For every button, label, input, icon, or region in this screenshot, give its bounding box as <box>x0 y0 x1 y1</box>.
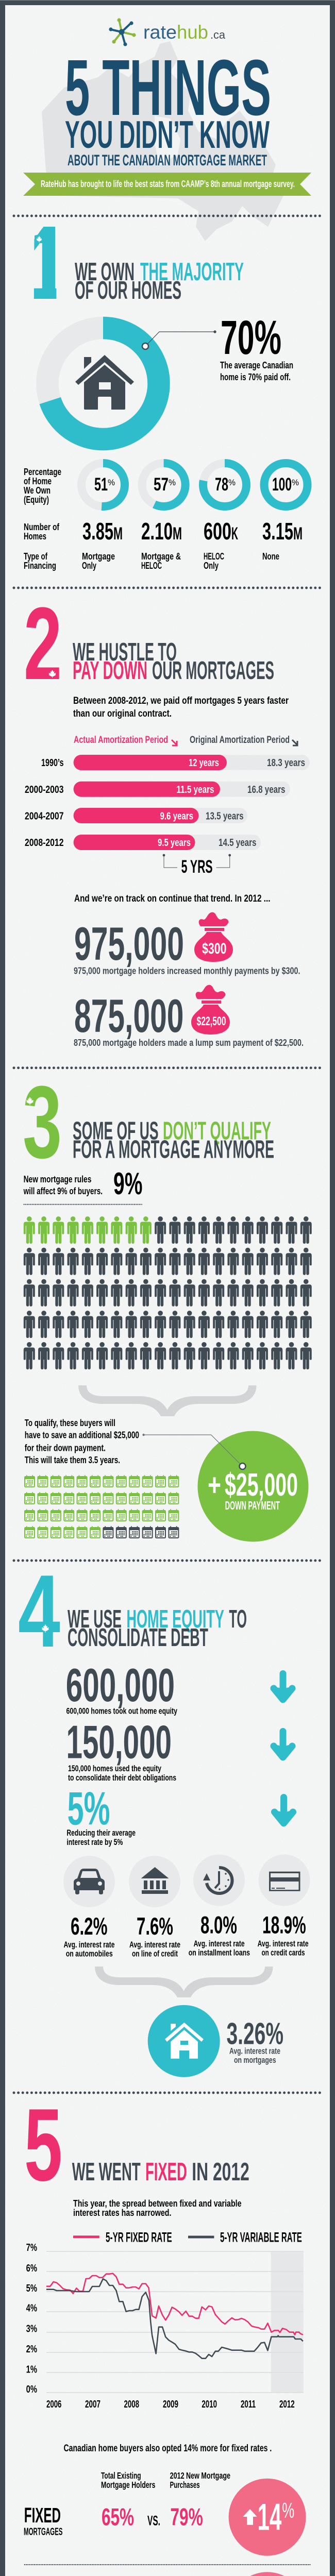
section 4 heading: HOME EQUITY <box>126 1605 224 1633</box>
icon: arrow down <box>274 1797 293 1823</box>
column headings: 2012 New Mortgage <box>170 2470 230 2481</box>
ribbon banner <box>23 173 311 196</box>
small donut 51%: % <box>108 478 115 487</box>
icon: credit card <box>258 1855 310 1906</box>
row: type of financing: HELOC <box>204 551 224 562</box>
section 4 heading: WE USE <box>68 1605 122 1633</box>
line chart: fixed vs variable rates: 6% <box>26 2263 37 2274</box>
interest rates row: 6.2% <box>71 1912 107 1940</box>
line chart: fixed vs variable rates: 0% <box>26 2384 37 2395</box>
row: type of financing: None <box>262 551 279 562</box>
stat: 5%: 5% <box>68 1783 110 1835</box>
row: fixed mortgages: % <box>282 2498 294 2522</box>
row label: percentage <box>24 467 61 505</box>
stat: 5%: Reducing their average <box>66 1828 136 1838</box>
section 3 heading: SOME OF US <box>73 1117 159 1145</box>
trend text: And we’re on track on continue that trend. In 2012 ... <box>74 893 270 904</box>
chart legend <box>73 2230 302 2245</box>
interest rates row <box>64 1911 309 1959</box>
section 5 numeral: 5 <box>24 2088 62 2202</box>
line chart: fixed vs variable rates: 2012 <box>279 2399 295 2410</box>
background map of Canada <box>42 41 289 241</box>
stat: 9% of buyers <box>23 1166 142 1201</box>
small donut 51%: 51 <box>94 474 108 495</box>
stat: 3.26%: Avg. interest rate <box>229 2046 280 2056</box>
small donut 57%: 57 <box>154 474 169 495</box>
section 3 heading <box>73 1117 274 1164</box>
section 4 heading <box>68 1605 247 1652</box>
section 5 heading: FIXED <box>145 2158 187 2186</box>
stat: 150,000: to consolidate their debt obligations <box>68 1773 176 1783</box>
circle: down payment <box>142 1431 308 1541</box>
section 2 intro text: Between 2008-2012, we paid off mortgages 5 years faster <box>73 696 289 706</box>
stat: 3.26%: on mortgages <box>234 2055 276 2065</box>
pictogram: 100 people, 9 highlighted <box>24 1216 312 1369</box>
row: fixed mortgages <box>24 2479 306 2556</box>
bar chart: amortization: 18.3 years <box>267 757 305 769</box>
bar chart: amortization: 2000-2003 <box>25 784 64 795</box>
bar chart: amortization: 9.5 years <box>158 837 191 849</box>
line chart: fixed vs variable rates: 1% <box>26 2364 37 2376</box>
interest rates row: 7.6% <box>137 1912 173 1940</box>
bar chart: amortization: 13.5 years <box>206 811 244 822</box>
row: number of homes: Homes <box>24 531 46 541</box>
icon: arrow down <box>274 1673 292 1700</box>
row: number of homes: K <box>231 524 238 544</box>
stat: 3.26% <box>227 2017 283 2065</box>
stat: 600,000 <box>66 1659 177 1716</box>
section 5 intro text: interest rates has narrowed. <box>73 2207 171 2218</box>
section 2 numeral: 2 <box>24 586 62 701</box>
line chart: fixed vs variable rates <box>26 2242 304 2410</box>
section 5 intro text <box>73 2198 241 2218</box>
row: type of financing: Mortgage & <box>141 551 181 562</box>
row: type of financing: Financing <box>24 561 56 571</box>
row: number of homes: 3.15 <box>262 518 293 545</box>
qualifying text: have to save an additional $25,000 <box>25 1430 139 1440</box>
small donut 100%: 100 <box>272 474 292 495</box>
chart legend: 5-YR FIXED RATE <box>106 2230 172 2245</box>
interest rates row: on credit cards <box>262 1948 305 1958</box>
section 4 heading: TO <box>229 1605 247 1633</box>
interest rates row: on installment loans <box>189 1948 250 1958</box>
circle: down payment: + <box>208 1468 221 1502</box>
logo: ratehub top: .ca <box>210 28 226 41</box>
stat: 975,000: $300 <box>202 940 227 957</box>
section 1 heading: WE OWN <box>75 258 135 286</box>
line chart: fixed vs variable rates: 3% <box>26 2324 37 2335</box>
row label: percentage: Percentage <box>24 467 61 477</box>
row: type of financing: Only <box>82 561 96 571</box>
section 3 numeral <box>23 1065 62 1180</box>
stat: 875,000 <box>74 985 304 1048</box>
line chart: fixed vs variable rates: 4% <box>26 2303 37 2314</box>
line chart: fixed vs variable rates: 2006 <box>46 2399 61 2410</box>
column headings: Total Existing <box>101 2470 141 2481</box>
section 5 heading <box>72 2158 249 2186</box>
stat: 975,000: 975,000 <box>74 918 184 970</box>
brace <box>95 1967 273 1997</box>
stat: 9% of buyers: New mortgage rules <box>24 1174 91 1184</box>
stat: 150,000 <box>66 1717 176 1783</box>
legend: amortization: Original Amortization Period <box>190 735 290 745</box>
stat: 9% of buyers: will affect 9% of buyers. <box>23 1186 103 1196</box>
section 4 numeral: 4 <box>18 1554 60 1669</box>
stat: 70%: 70% <box>221 311 281 364</box>
row: number of homes: 600 <box>204 518 231 545</box>
stat: 9% of buyers: 9% <box>113 1166 142 1201</box>
line chart: fixed vs variable rates: 2007 <box>85 2399 100 2410</box>
stat: 600,000: 600,000 homes took out home equity <box>66 1706 177 1716</box>
bar chart: amortization: 12 years <box>189 757 219 769</box>
pictogram: 42 month calendars <box>24 1475 179 1538</box>
icon: car <box>63 1856 115 1907</box>
row: fixed mortgages: VS. <box>147 2513 160 2529</box>
small donut 100%: % <box>292 478 299 487</box>
logo: ratehub top: rate <box>143 22 177 43</box>
section 2 heading <box>73 638 274 685</box>
interest rates row: Avg. interest rate <box>64 1940 114 1950</box>
bar chart: amortization: 9.6 years <box>160 811 193 822</box>
bar chart: amortization: 2008-2012 <box>25 837 64 849</box>
stat: 70% <box>220 311 293 382</box>
column headings: Mortgage Holders <box>101 2480 156 2490</box>
donut chart: 70% <box>47 328 159 439</box>
section 3 numeral: 3 <box>23 1065 62 1180</box>
interest rates row: on line of credit <box>132 1949 178 1959</box>
section 1 numeral <box>31 206 58 321</box>
row label: percentage: We Own <box>24 485 51 496</box>
row: number of homes: M <box>293 524 303 544</box>
row: type of financing: Mortgage <box>82 551 115 562</box>
section 2 intro text <box>73 696 289 719</box>
section 2 numeral <box>24 586 62 701</box>
column headings <box>101 2470 230 2490</box>
stat: 70%: home is 70% paid off. <box>220 371 291 382</box>
stat: 3.26%: 3.26% <box>227 2017 283 2051</box>
qualifying text: To qualify, these buyers will <box>25 1417 115 1428</box>
bracket: 5 YRS: 5 YRS <box>181 857 213 877</box>
line chart: fixed vs variable rates: 5% <box>26 2283 37 2294</box>
section 5 heading: WE WENT <box>72 2158 141 2186</box>
stat: 975,000 <box>74 912 300 976</box>
row: type of financing: Only <box>204 561 219 571</box>
row: type of financing: Type of <box>24 551 48 562</box>
stat: 70%: The average Canadian <box>220 360 293 370</box>
icon: arrow down <box>274 1731 292 1757</box>
line chart: fixed vs variable rates: 2008 <box>124 2399 139 2410</box>
interest rates row: 8.0% <box>200 1911 237 1939</box>
small donut 78%: % <box>228 478 236 487</box>
logo: ratehub top: hub <box>177 22 208 43</box>
logo: ratehub top <box>109 18 226 46</box>
row label: percentage: of Home <box>24 476 52 486</box>
bar chart: amortization: 1990’s <box>41 757 64 769</box>
row: number of homes: Number of <box>24 522 60 532</box>
section 4 heading: CONSOLIDATE DEBT <box>68 1624 208 1652</box>
row: fixed mortgages: MORTGAGES <box>24 2527 63 2538</box>
row: fixed mortgages: 65% <box>102 2503 134 2531</box>
row: number of homes <box>24 518 303 545</box>
row: fixed mortgages: FIXED <box>24 2503 61 2527</box>
row: number of homes: M <box>173 524 182 544</box>
row: fixed mortgages: 14 <box>258 2497 282 2538</box>
small donut 78%: 78 <box>215 474 228 495</box>
stat: 5%: interest rate by 5% <box>66 1837 123 1847</box>
icon: clock <box>193 1855 245 1906</box>
bar chart: amortization <box>25 755 310 850</box>
section 1 heading: OF OUR HOMES <box>75 277 181 304</box>
small donut 78% <box>203 463 246 506</box>
row: fixed mortgages: 79% <box>170 2503 203 2531</box>
bar chart: amortization: 2004-2007 <box>25 811 64 822</box>
section 2 intro text: than our original contract. <box>73 708 172 719</box>
interest rates row: Avg. interest rate <box>194 1939 245 1948</box>
brace <box>78 1385 257 1416</box>
small donut 57%: % <box>169 478 176 487</box>
section 5 heading: IN 2012 <box>192 2158 249 2186</box>
row: variable mortgages <box>24 2572 306 2576</box>
interest rates row: 18.9% <box>262 1911 306 1939</box>
line chart: fixed vs variable rates: 7% <box>26 2242 37 2253</box>
bar chart: amortization: 16.8 years <box>247 784 286 795</box>
stat: 600,000: 600,000 <box>66 1659 175 1711</box>
line chart: fixed vs variable rates: 2009 <box>163 2399 178 2410</box>
section 2 heading: PAY DOWN <box>73 657 147 685</box>
section 2 heading: WE HUSTLE TO <box>73 638 177 666</box>
row: number of homes: 2.10 <box>141 518 173 545</box>
icon: house <box>75 355 134 410</box>
interest rates row: on automobiles <box>66 1949 113 1959</box>
title <box>65 43 271 169</box>
legend: amortization: Actual Amortization Period <box>74 735 168 745</box>
interest rates row: Avg. interest rate <box>258 1939 309 1948</box>
small donut 100% <box>264 463 307 506</box>
legend: amortization <box>74 735 297 745</box>
qualifying text: for their down payment. <box>25 1443 106 1453</box>
bar chart: amortization: 14.5 years <box>219 837 257 849</box>
icon: mortgage house circle <box>148 2005 220 2077</box>
interest rates row: Avg. interest rate <box>129 1940 180 1950</box>
circle: down payment: DOWN PAYMENT <box>225 1499 280 1512</box>
small donut 57% <box>142 463 186 506</box>
callout line <box>142 330 216 349</box>
qualifying text: This will take them 3.5 years. <box>25 1454 120 1465</box>
small donut 51% <box>81 463 125 506</box>
section 5 intro text: This year, the spread between fixed and variable <box>73 2198 241 2209</box>
section 1 heading: THE MAJORITY <box>140 258 244 286</box>
stat: 150,000: 150,000 <box>66 1717 172 1769</box>
line chart: fixed vs variable rates: 2010 <box>202 2399 217 2410</box>
bar chart: amortization: 11.5 years <box>176 784 214 795</box>
row label: percentage: (Equity) <box>24 495 49 505</box>
row: type of financing: HELOC <box>141 561 162 571</box>
stat: 150,000: 150,000 homes used the equity <box>68 1764 161 1773</box>
text: 1 <box>31 206 58 321</box>
column headings: Purchases <box>170 2480 200 2490</box>
line chart: fixed vs variable rates: 2% <box>26 2344 37 2355</box>
icon: bank <box>129 1856 180 1907</box>
section 1 heading <box>75 258 244 304</box>
qualifying text <box>25 1417 139 1465</box>
stat: 875,000: $22,500 <box>197 1014 226 1028</box>
line chart: fixed vs variable rates: 2011 <box>241 2399 256 2410</box>
bracket: 5 YRS <box>163 854 231 877</box>
row: number of homes: 3.85 <box>82 518 113 545</box>
row: number of homes: M <box>113 524 123 544</box>
stat: 875,000: 875,000 <box>74 990 183 1042</box>
row: type of financing <box>24 551 279 571</box>
